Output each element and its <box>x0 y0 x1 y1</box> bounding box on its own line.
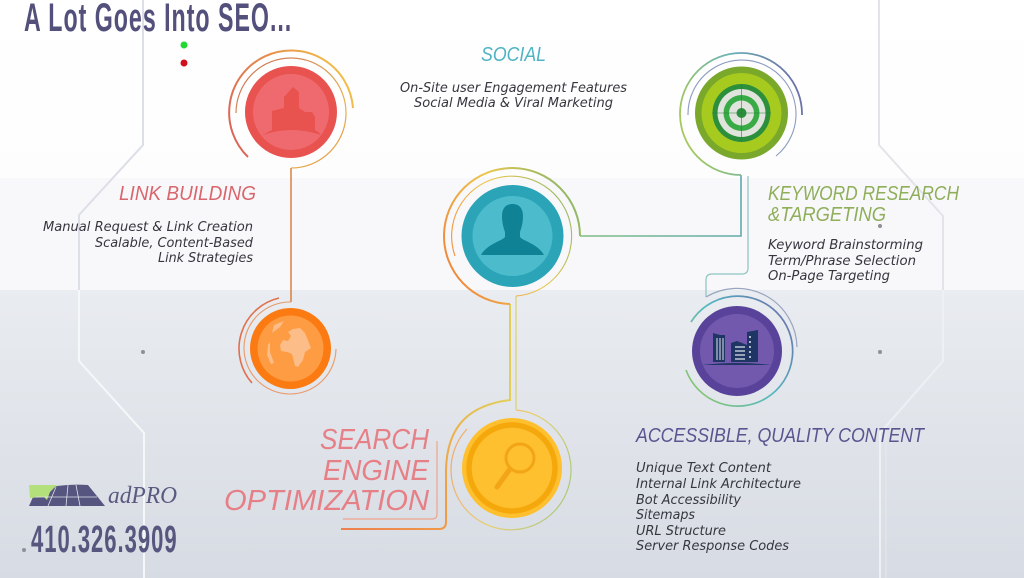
text: content details: Unique Text Content <box>636 460 772 476</box>
green status dot <box>180 42 188 48</box>
text: content details: Internal Link Architecture <box>636 476 801 492</box>
heading: link building: LINK BUILDING <box>119 183 256 205</box>
icon: office buildings <box>702 330 771 365</box>
text: keyword details <box>768 237 923 284</box>
connector lines <box>291 168 748 529</box>
node: content (purple) <box>686 288 797 406</box>
small grey dots <box>22 224 882 552</box>
text: social details: Social Media & Viral Marketing <box>414 95 613 111</box>
text: social details: On-Site user Engagement Features <box>400 80 627 96</box>
text: content details: Bot Accessibility <box>636 492 742 508</box>
text: link building details: Scalable, Content-Based <box>95 235 253 251</box>
icon: target <box>712 84 771 142</box>
icon: person silhouette <box>481 204 544 255</box>
node: search (yellow) <box>451 410 571 530</box>
text: link building details: Link Strategies <box>158 250 253 266</box>
text: keyword details: Term/Phrase Selection <box>768 253 916 269</box>
text: keyword details: On-Page Targeting <box>768 268 890 284</box>
icon: globe continents <box>267 321 311 367</box>
left hexagon frame line <box>79 0 144 578</box>
right hexagon frame line <box>879 0 943 578</box>
text: keyword details: Keyword Brainstorming <box>768 237 923 253</box>
text: content details: URL Structure <box>636 523 726 539</box>
heading: search engine optimization: ENGINE <box>323 455 430 487</box>
text: content details: Sitemaps <box>636 507 695 523</box>
node: globe (orange) <box>239 298 336 394</box>
heading: social: SOCIAL <box>481 44 546 66</box>
logo: adPRO: adPRO <box>108 483 177 509</box>
icon: magnifier <box>497 444 534 487</box>
heading: search engine optimization <box>224 424 430 517</box>
text: link building details <box>43 219 253 266</box>
text: content details: Server Response Codes <box>636 538 789 554</box>
node: keyword (green) <box>680 53 802 175</box>
heading: keyword research <box>768 183 959 226</box>
heading: accessible content: ACCESSIBLE, QUALITY CONTENT <box>635 425 926 447</box>
logo: adPRO <box>29 483 177 509</box>
text: social details <box>400 80 627 111</box>
icon: city skyline <box>263 87 321 135</box>
heading: keyword research: KEYWORD RESEARCH <box>768 183 959 205</box>
red status dot <box>180 60 188 66</box>
text: content details <box>636 460 801 554</box>
phone number: 410.326.3909 <box>31 518 178 561</box>
node: social (teal) <box>444 168 580 304</box>
node: link building (red) <box>229 50 353 168</box>
heading: keyword research: &TARGETING <box>768 204 886 226</box>
text: link building details: Manual Request & Link Creation <box>43 219 253 235</box>
heading: search engine optimization: SEARCH <box>320 424 429 456</box>
heading: search engine optimization: OPTIMIZATION <box>224 485 429 517</box>
